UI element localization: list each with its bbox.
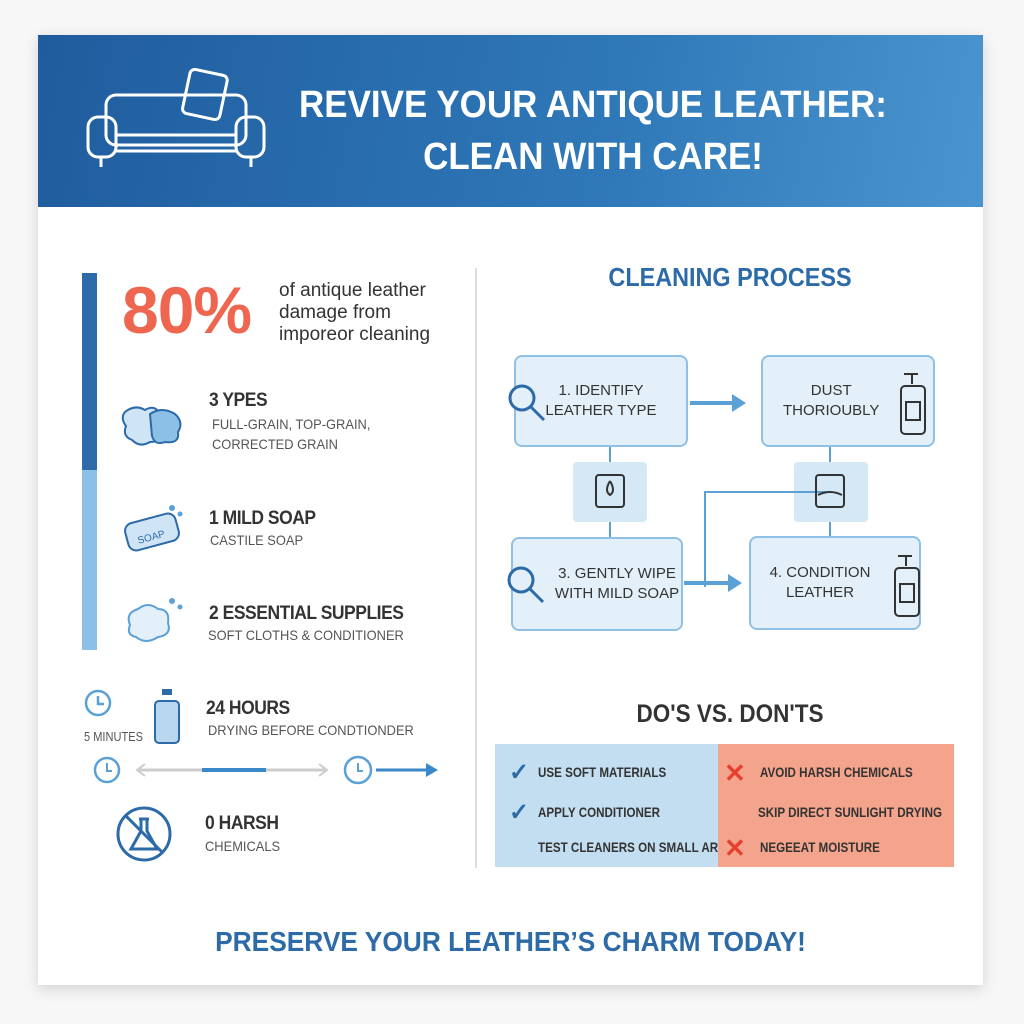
step 3 [511, 537, 683, 631]
stat: supplies [128, 598, 404, 643]
stat: 80%: damage from [279, 302, 391, 323]
stat: 3 types: FULL-GRAIN, TOP-GRAIN, [212, 416, 370, 432]
donts column: ✕ [724, 758, 746, 788]
icon: sofa [86, 68, 266, 167]
flowchart [508, 355, 935, 631]
stat: mild soap: SOAP [137, 529, 167, 547]
donts column: AVOID HARSH CHEMICALS [760, 764, 913, 780]
title: CLEAN WITH CARE! [423, 136, 763, 178]
stat: harsh chemicals: CHEMICALS [205, 838, 280, 854]
dos column: USE SOFT MATERIALS [538, 764, 666, 780]
dos column: ✓ [509, 799, 529, 826]
stat: 80% [122, 273, 430, 347]
stat: 3 types: CORRECTED GRAIN [212, 436, 338, 452]
stat: harsh chemicals: 0 HARSH [205, 813, 279, 834]
arrow right [690, 394, 746, 412]
stat: mild soap: 1 MILD SOAP [209, 508, 316, 529]
title [299, 84, 887, 178]
stat: mild soap: CASTILE SOAP [210, 532, 303, 548]
step 2 [761, 355, 935, 447]
heading: cleaning process: CLEANING PROCESS [608, 262, 852, 292]
title: REVIVE YOUR ANTIQUE LEATHER: [299, 84, 887, 126]
dos column: TEST CLEANERS ON SMALL AREA [538, 839, 734, 855]
step 4: LEATHER [786, 584, 854, 601]
dos column: ✓ [509, 759, 529, 786]
stat: 24 hours [84, 689, 414, 744]
step 4 [749, 536, 921, 630]
step 3: WITH MILD SOAP [555, 585, 679, 602]
step 2: DUST [811, 382, 852, 399]
step 3: 3. GENTLY WIPE [558, 565, 676, 582]
donts column [718, 744, 954, 867]
connector icons [573, 462, 647, 522]
stat: 3 types [122, 390, 370, 452]
stat: 3 types: 3 YPES [209, 390, 267, 411]
donts column: ✕ [724, 833, 746, 863]
timeline arrow [94, 756, 438, 784]
step 1: LEATHER TYPE [545, 402, 657, 419]
stat: 24 hours: 24 HOURS [206, 698, 290, 719]
stat: mild soap [124, 505, 316, 552]
step 4: 4. CONDITION [770, 564, 870, 581]
step 1 [514, 355, 688, 447]
dos and donts table [495, 744, 954, 867]
step 2: THORIOUBLY [783, 402, 879, 419]
stat: supplies: SOFT CLOTHS & CONDITIONER [208, 627, 404, 643]
divider vertical [475, 268, 477, 868]
donts column: NEGEEAT MOISTURE [760, 839, 880, 855]
stat: 80%: 80% [122, 273, 251, 347]
progress bar [82, 273, 97, 650]
step 1: 1. IDENTIFY [558, 382, 644, 399]
stat: 24 hours: DRYING BEFORE CONDTIONDER [208, 722, 414, 738]
dos column [495, 744, 718, 867]
stat: 24 hours: 5 MINUTES [84, 729, 143, 744]
footer tagline: PRESERVE YOUR LEATHER’S CHARM TODAY! [215, 926, 806, 957]
donts column: SKIP DIRECT SUNLIGHT DRYING [758, 804, 942, 820]
header banner [38, 35, 983, 207]
left stats panel [82, 273, 438, 862]
stat: 80%: of antique leather [279, 280, 426, 301]
arrow right [684, 574, 742, 592]
stat: harsh chemicals [116, 806, 280, 862]
stat: supplies: 2 ESSENTIAL SUPPLIES [209, 603, 403, 624]
dos column: APPLY CONDITIONER [538, 804, 660, 820]
heading: dos vs donts: DO'S VS. DON'TS [636, 700, 823, 728]
stat: 80%: imporeor cleaning [279, 324, 430, 345]
